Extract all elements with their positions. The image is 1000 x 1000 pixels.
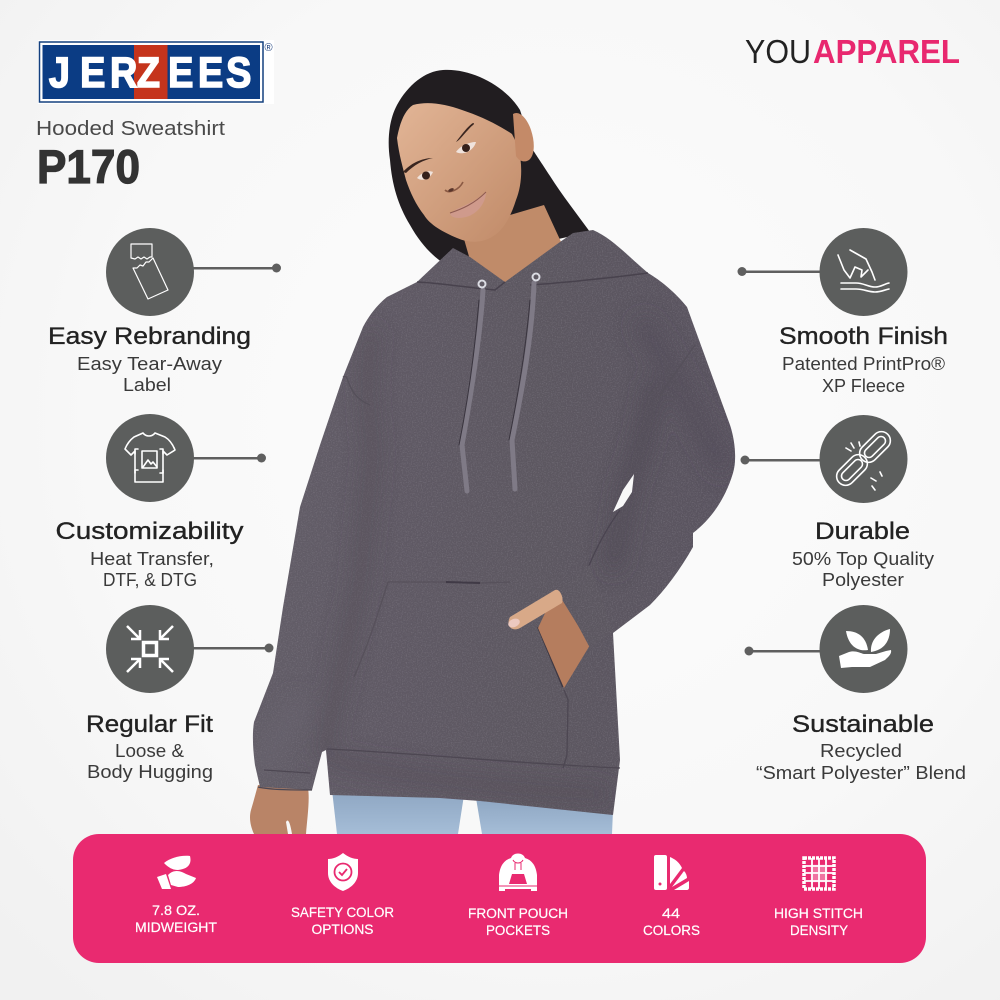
ear	[513, 113, 534, 161]
description: 50% Top Quality	[792, 549, 934, 569]
connector	[744, 646, 825, 656]
heading: Easy Rebranding	[48, 323, 251, 350]
label: 7.8 OZ.	[152, 902, 200, 918]
description	[87, 741, 213, 782]
label: DENSITY	[790, 922, 849, 938]
icon: printed t-shirt	[106, 414, 194, 502]
photo: model wearing hoodie	[250, 70, 735, 834]
hair	[389, 70, 590, 264]
connector	[738, 267, 824, 276]
description: Recycled	[820, 741, 902, 761]
description: Patented PrintPro®	[782, 354, 945, 374]
logo: Jerzees: JERZEES	[49, 48, 251, 97]
hoodie seams	[258, 273, 695, 790]
label	[774, 905, 863, 938]
panel: Easy Rebranding	[48, 228, 281, 395]
panel: Customizability	[56, 414, 266, 590]
icon: compress arrows	[106, 605, 194, 693]
description: DTF, & DTG	[103, 570, 197, 590]
heading: Sustainable	[792, 711, 934, 738]
panel: Sustainable	[744, 605, 966, 783]
connector	[740, 456, 825, 464]
label: COLORS	[643, 922, 700, 938]
description	[756, 741, 966, 783]
gap between arm and torso	[613, 474, 634, 512]
panel: Smooth Finish	[738, 228, 948, 396]
label	[135, 902, 217, 935]
facial features	[403, 123, 486, 218]
label: OPTIONS	[312, 921, 374, 937]
description: Loose &	[115, 741, 184, 761]
connector	[190, 644, 274, 652]
icon: hand holding leaves	[820, 605, 908, 693]
icon: swatch fan	[654, 855, 689, 890]
label: POCKETS	[486, 922, 550, 938]
feature: colors	[643, 855, 700, 938]
heading: Durable	[815, 518, 910, 545]
description: Polyester	[822, 570, 904, 590]
feature: pouch pockets	[468, 854, 568, 938]
label: FRONT POUCH	[468, 905, 568, 921]
heading: Regular Fit	[86, 711, 213, 738]
brand: YouApparel: APPAREL	[813, 33, 960, 70]
product code: P170	[37, 140, 140, 193]
brand: YouApparel	[745, 33, 960, 70]
description	[77, 354, 222, 395]
description: Body Hugging	[87, 762, 213, 782]
icon: chain link	[820, 415, 908, 503]
jeans	[332, 790, 613, 834]
product type: Hooded Sweatshirt	[36, 118, 225, 140]
sleeve cuff over hand	[558, 565, 613, 648]
description: Heat Transfer,	[90, 549, 214, 569]
label: 44	[662, 905, 680, 921]
description	[782, 354, 945, 396]
hand in pocket	[507, 590, 590, 688]
icon: tear-away label	[106, 228, 194, 316]
label	[468, 905, 568, 938]
label: MIDWEIGHT	[135, 919, 217, 935]
feature: weight	[135, 856, 217, 935]
icon: shield check	[328, 853, 358, 891]
icon: stitched square	[804, 858, 834, 889]
logo: Jerzees: ®	[264, 42, 273, 54]
description: “Smart Polyester” Blend	[756, 763, 966, 783]
feature: safety colors	[291, 853, 394, 937]
heading: Customizability	[56, 518, 244, 545]
description: Label	[123, 375, 171, 395]
panel: feature banner	[73, 834, 926, 963]
icon: hoodie	[499, 854, 537, 891]
fabric shading	[320, 327, 724, 796]
description	[90, 549, 214, 590]
panel: Durable	[740, 415, 934, 590]
description: XP Fleece	[822, 376, 905, 396]
feature: stitch density	[774, 858, 863, 938]
label	[643, 905, 700, 938]
brand: YouApparel: YOU	[745, 33, 811, 70]
logo: Jerzees	[38, 40, 274, 104]
left hand	[250, 785, 309, 834]
connector	[190, 454, 266, 462]
panel: Regular Fit	[86, 605, 274, 782]
face	[397, 103, 521, 242]
description	[792, 549, 934, 590]
label: HIGH STITCH	[774, 905, 863, 921]
heading: Smooth Finish	[779, 323, 948, 350]
drawstrings	[459, 274, 540, 491]
connector	[190, 264, 281, 272]
hoodie body	[253, 230, 735, 815]
neck	[462, 205, 562, 285]
description: Easy Tear-Away	[77, 354, 222, 374]
label	[291, 904, 394, 937]
icon: hand on smooth fabric	[820, 228, 908, 316]
icon: hand with leaf	[157, 856, 196, 889]
label: SAFETY COLOR	[291, 904, 394, 920]
